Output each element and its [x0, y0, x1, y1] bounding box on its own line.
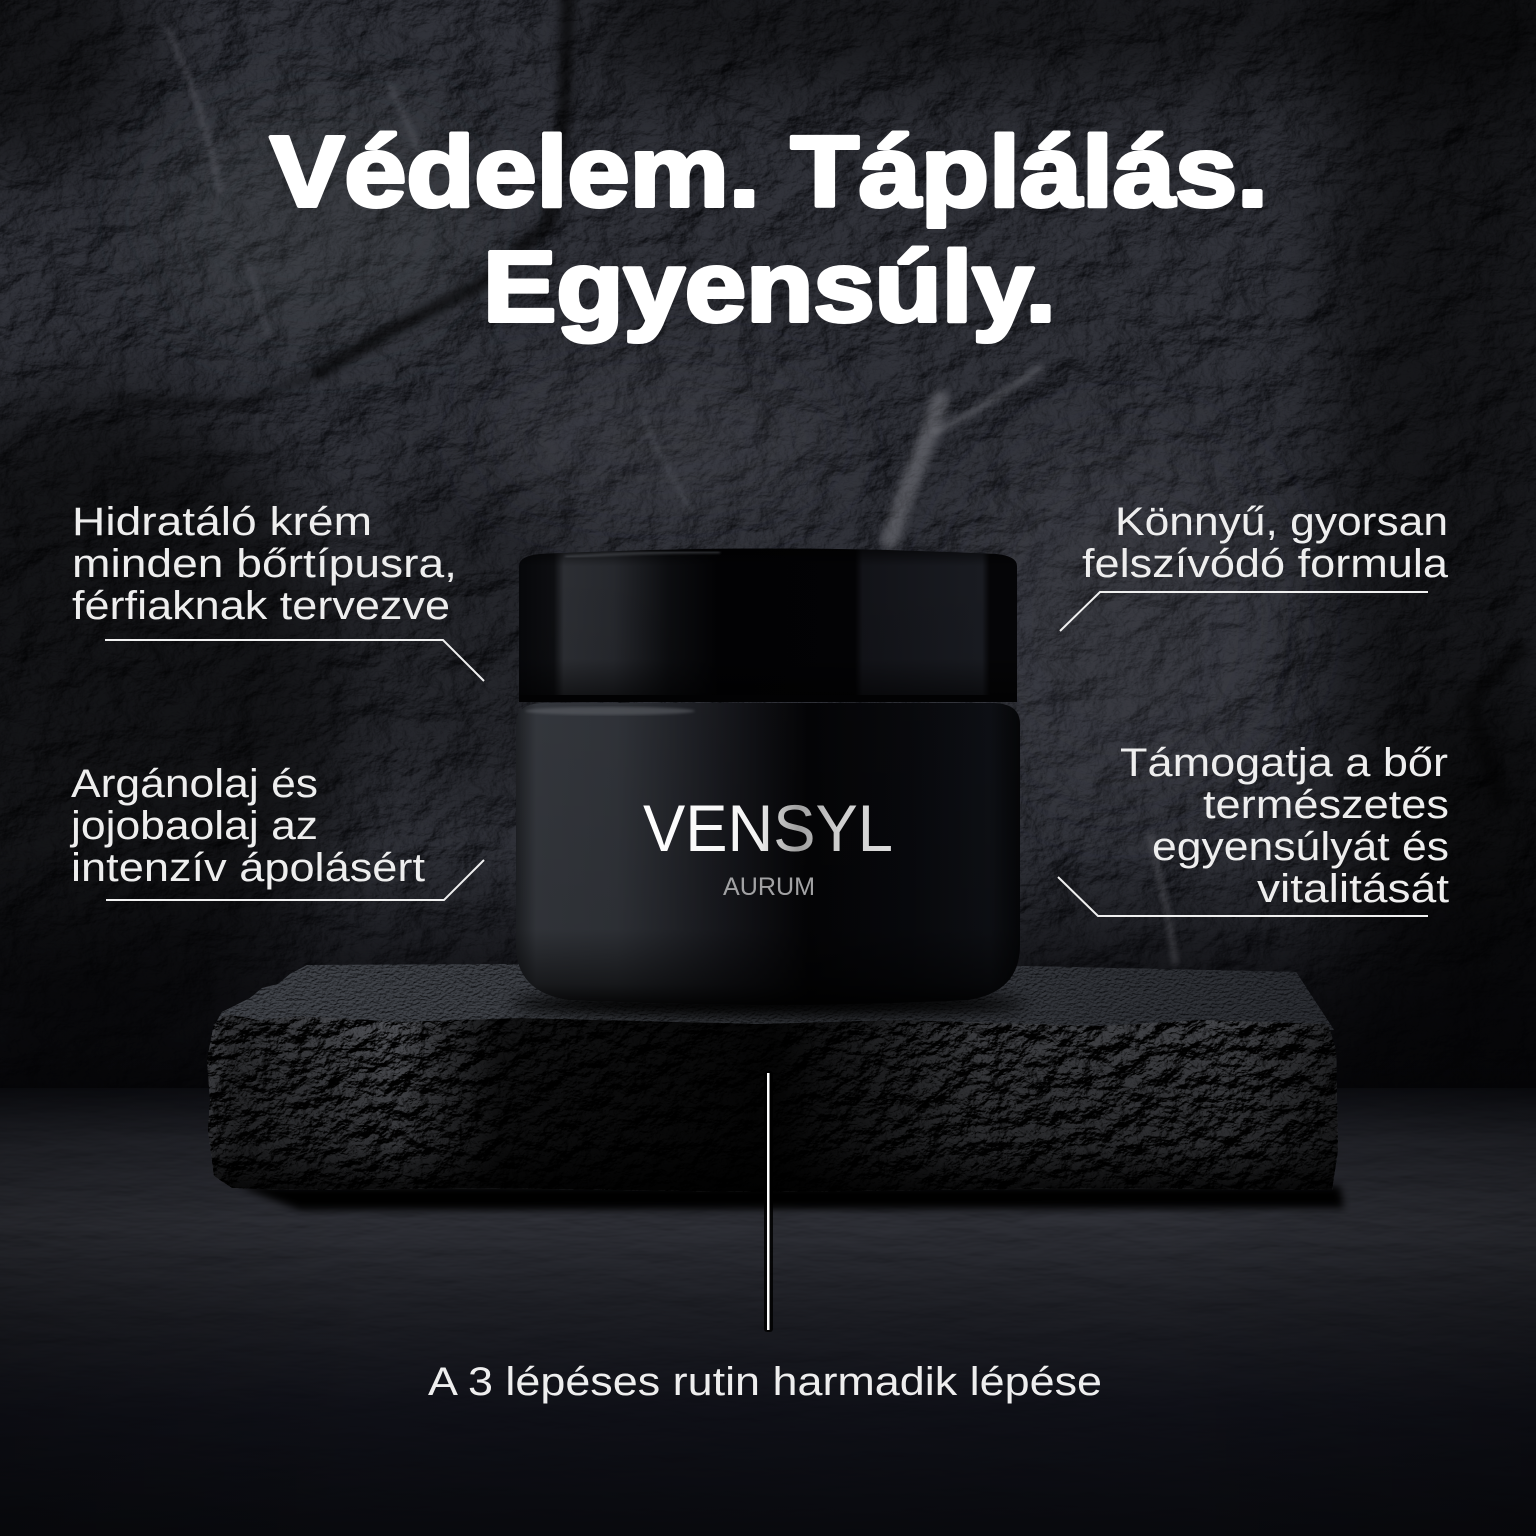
jar body [516, 703, 1020, 1005]
callout: oils: Argánolaj és [71, 762, 318, 806]
callout: moisturizer: férfiaknak tervezve [72, 584, 450, 628]
floor surface [0, 1088, 1536, 1536]
jar logo: VENSYL: VENSYL [643, 791, 893, 865]
callout: oils: jojobaolaj az [70, 804, 318, 848]
wall cracks and mineral streaks [120, 0, 1520, 962]
title [270, 116, 1268, 343]
stone wall background [0, 0, 1536, 1110]
stone slab pedestal [200, 960, 1350, 1210]
callout: skin balance: Támogatja a bőr [1120, 741, 1448, 785]
slab front face [200, 1010, 1350, 1200]
callout: oils: intenzív ápolásért [71, 846, 425, 890]
callout: skin balance [1058, 741, 1449, 916]
wall shadow masses [0, 0, 1536, 1100]
title: Egyensúly. [483, 231, 1056, 343]
callout: skin balance: természetes [1203, 783, 1449, 827]
title: Védelem. Táplálás. [270, 116, 1268, 228]
footer caption: A 3 lépéses rutin harmadik lépése [428, 1360, 1102, 1404]
product jar [510, 548, 1026, 1017]
slab shadow [238, 1186, 1344, 1210]
callout: skin balance: vitalitását [1257, 867, 1449, 911]
callout: light formula: felszívódó formula [1082, 542, 1449, 586]
callout: moisturizer: Hidratáló krém [72, 500, 372, 544]
callout: moisturizer: minden bőrtípusra, [72, 542, 457, 586]
callout: moisturizer [72, 500, 484, 681]
slab top face [216, 964, 1334, 1030]
callout: light formula [1060, 500, 1449, 631]
callout: light formula: Könnyű, gyorsan [1115, 500, 1448, 544]
callout: oils [70, 762, 484, 900]
callout: skin balance: egyensúlyát és [1152, 825, 1449, 869]
jar sub-label: AURUM: AURUM [723, 873, 815, 901]
wall light masses [150, 100, 1290, 810]
jar contact shadow [510, 991, 1026, 1017]
jar lid [519, 548, 1017, 702]
vertical connector line [764, 1071, 773, 1332]
